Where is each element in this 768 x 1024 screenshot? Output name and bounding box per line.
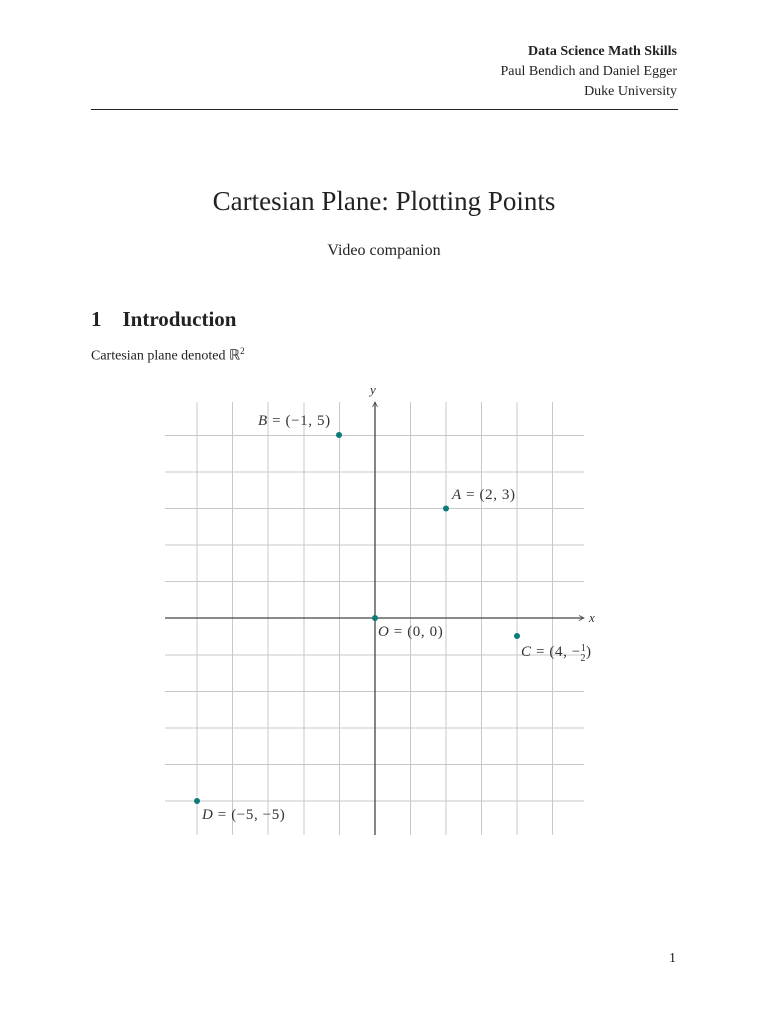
point labels: [201, 413, 592, 823]
page number: 1: [669, 951, 676, 966]
point labels: O = (0, 0): [378, 624, 443, 640]
x axis: [165, 610, 595, 625]
point labels: B = (−1, 5): [258, 413, 331, 429]
point labels: 2: [580, 653, 586, 664]
intro text: Cartesian plane denoted ℝ2: [91, 346, 245, 364]
header authors: Paul Bendich and Daniel Egger: [500, 64, 677, 79]
y axis: y: [368, 382, 376, 397]
point labels: 1: [581, 643, 586, 654]
header: [500, 44, 677, 99]
header title: Data Science Math Skills: [528, 44, 677, 59]
header rule: [91, 109, 678, 110]
y axis: [368, 382, 378, 835]
points: [194, 432, 520, 804]
point labels: A = (2, 3): [451, 487, 516, 503]
point labels: D = (−5, −5): [201, 807, 285, 823]
subtitle: Video companion: [327, 242, 441, 259]
header institution: Duke University: [584, 84, 677, 99]
title: Cartesian Plane: Plotting Points: [213, 186, 555, 216]
x axis: x: [588, 610, 595, 625]
point labels: ): [586, 644, 592, 660]
section heading: 1 Introduction: [91, 307, 236, 331]
point labels: C = (4, −: [521, 644, 581, 660]
